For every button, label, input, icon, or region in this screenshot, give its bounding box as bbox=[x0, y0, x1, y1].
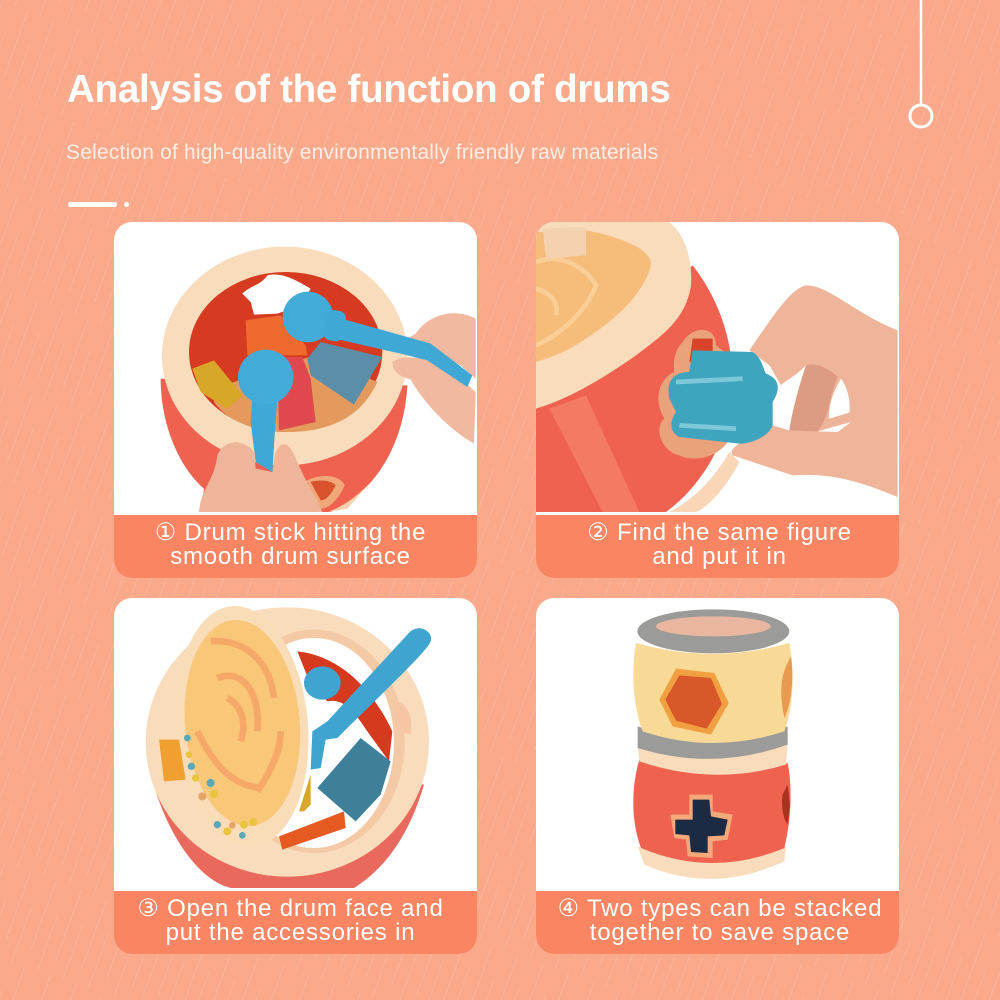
subtitle: Selection of high-quality environmentally friendly raw materials bbox=[66, 141, 658, 164]
caption: and put it in bbox=[652, 543, 787, 570]
hanging ring ornament bbox=[908, 0, 934, 128]
accent dash and dot bbox=[68, 202, 129, 207]
caption bbox=[114, 515, 477, 578]
illustration: two stacked drums bbox=[633, 609, 793, 879]
illustration: shape inserted into drum bbox=[536, 222, 898, 512]
caption bbox=[114, 891, 477, 954]
caption: smooth drum surface bbox=[170, 543, 411, 570]
panel: step 4 bbox=[536, 598, 899, 954]
caption: ④ Two types can be stacked bbox=[558, 895, 882, 922]
illustration: drum with open face bbox=[146, 606, 432, 888]
panel: step 3 bbox=[114, 598, 477, 954]
illustration: drum struck by sticks bbox=[160, 246, 476, 512]
panel: step 2 bbox=[536, 222, 899, 578]
caption: ③ Open the drum face and bbox=[137, 895, 444, 922]
caption bbox=[536, 891, 899, 954]
caption: together to save space bbox=[590, 919, 850, 946]
caption: ② Find the same figure bbox=[587, 519, 852, 546]
title: Analysis of the function of drums bbox=[67, 68, 671, 111]
caption: ① Drum stick hitting the bbox=[155, 519, 426, 546]
caption bbox=[536, 515, 899, 578]
panel: step 1 bbox=[114, 222, 477, 578]
caption: put the accessories in bbox=[166, 919, 415, 946]
